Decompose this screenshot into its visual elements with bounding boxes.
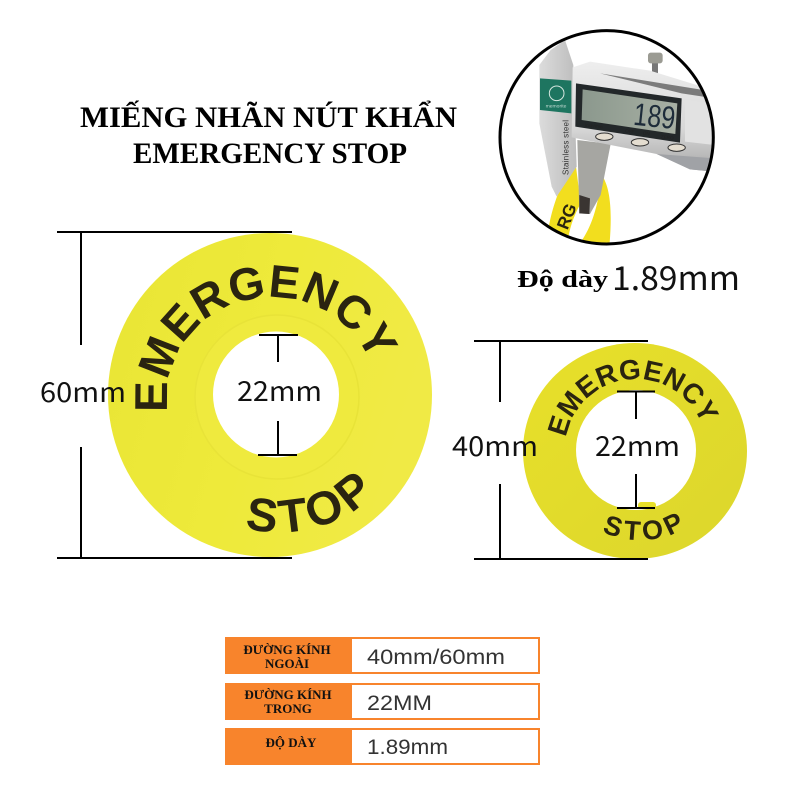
dimension: 22mm on small label: 22mm	[595, 425, 680, 464]
label lettering: RG	[552, 201, 581, 232]
button labels: inch/mm	[585, 123, 603, 130]
row: inner diameter	[225, 683, 539, 720]
small disc text STOP: STOP	[604, 514, 680, 540]
row: thickness	[225, 728, 539, 765]
caliper fixed beam	[539, 40, 577, 197]
dimension: 40mm: 40mm	[452, 425, 538, 464]
icon: yellow label held in caliper	[546, 167, 611, 247]
digital display reading 1.89: 189	[632, 96, 677, 136]
stainless steel engraving: Stainless steel	[562, 120, 571, 175]
large disc text STOP: STOP	[247, 474, 363, 532]
maker badge: memorite	[546, 103, 567, 109]
digital display reading 1.89	[575, 83, 682, 143]
small disc notch	[638, 502, 656, 509]
photo: caliper measuring thickness	[490, 30, 723, 250]
dimension: 22mm on large label: 22mm	[237, 370, 322, 409]
button labels	[647, 132, 648, 133]
specification table	[225, 637, 539, 765]
dimension: 22mm on small label	[595, 392, 680, 508]
button labels: ON	[643, 131, 650, 136]
row: inner diameter: ĐƯỜNG KÍNH	[244, 687, 332, 702]
maker badge	[540, 78, 571, 113]
thickness caption: 1.89mm	[612, 252, 740, 300]
small 40mm emergency stop label	[523, 343, 747, 558]
button labels: OFF	[625, 128, 635, 134]
small disc body	[523, 343, 747, 559]
row: outer diameter: ĐƯỜNG KÍNH	[243, 642, 331, 657]
title: MIẾNG NHÃN NÚT KHẨN	[80, 100, 457, 134]
large disc hole	[213, 332, 339, 458]
small disc hole	[576, 390, 696, 510]
row: outer diameter: 40mm/60mm	[367, 646, 505, 669]
caliper locking knob	[648, 52, 663, 73]
small disc text EMERGENCY: EMERGENCY	[548, 360, 720, 436]
row: thickness: 1.89mm	[367, 736, 448, 759]
dimension: 60mm: 60mm	[40, 371, 126, 410]
caliper sliding jaw	[577, 140, 611, 214]
inner ridge	[195, 315, 359, 479]
title: EMERGENCY STOP	[133, 137, 407, 170]
thickness caption	[517, 252, 740, 300]
large disc body	[108, 233, 432, 557]
row: inner diameter: TRONG	[264, 701, 312, 716]
dimension: 40mm	[452, 341, 648, 559]
display buttons	[596, 133, 685, 151]
caliper slider body	[572, 62, 714, 172]
dimension: 60mm	[40, 232, 292, 558]
row: outer diameter	[225, 637, 539, 674]
photo circular frame	[500, 31, 713, 244]
large 60mm emergency stop label	[108, 233, 432, 557]
row: inner diameter: 22MM	[367, 692, 432, 715]
large disc text EMERGENCY: EMERGENCY	[135, 265, 398, 409]
button labels: ZERO	[661, 134, 674, 141]
thickness caption: Độ dày	[517, 267, 608, 293]
dimension: 22mm on large label	[237, 335, 322, 455]
row: outer diameter: NGOÀI	[265, 656, 309, 671]
row: thickness: ĐỘ DÀY	[266, 735, 317, 750]
title	[80, 100, 457, 170]
